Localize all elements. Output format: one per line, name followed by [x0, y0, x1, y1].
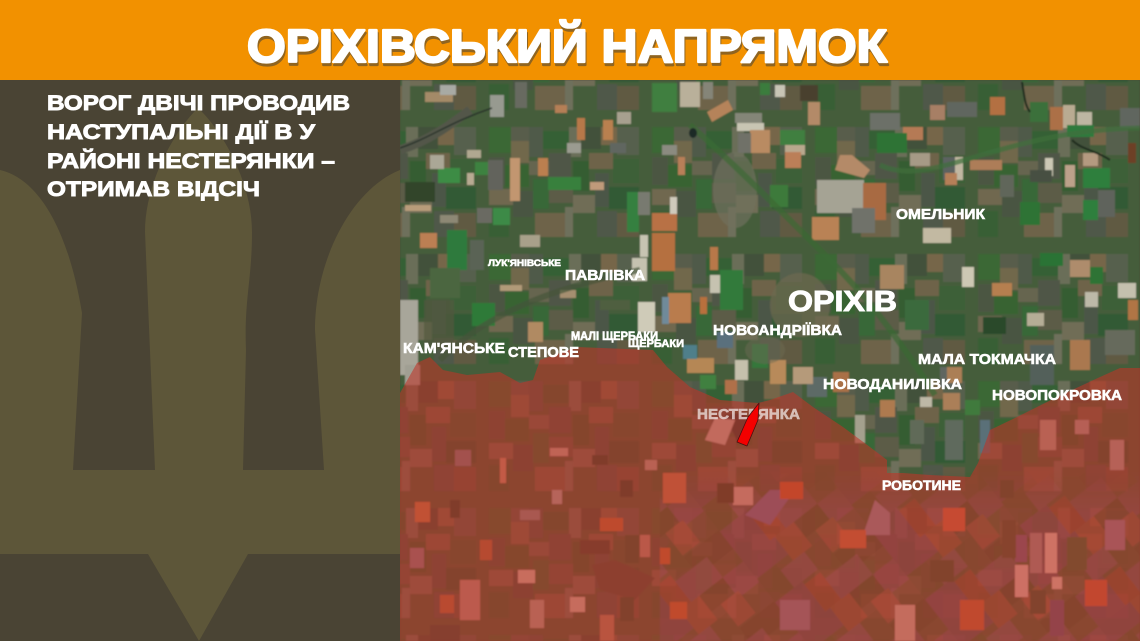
satellite map: [400, 80, 1140, 641]
text block: description: НАСТУПАЛЬНІ ДІЇ В У: [47, 120, 316, 144]
map labels: settlements: НОВОАНДРІЇВКА: [713, 322, 842, 339]
north-west fields: [400, 82, 786, 394]
map labels: settlements: МАЛА ТОКМАЧКА: [918, 351, 1056, 368]
map labels: settlements: ОМЕЛЬНИК: [896, 206, 986, 223]
map labels: settlements: КАМ'ЯНСЬКЕ: [403, 340, 505, 357]
map labels: settlements: НЕСТЕРЯНКА: [697, 406, 800, 423]
map labels: settlements: ПАВЛІВКА: [565, 267, 645, 284]
map labels: settlements: [403, 206, 1122, 493]
north-east fields: [770, 85, 1140, 460]
text block: description: РАЙОНІ НЕСТЕРЯНКИ –: [47, 148, 335, 173]
arrow: enemy attack direction: [737, 403, 759, 446]
map labels: settlements: ЩЕРБАКИ: [628, 338, 684, 350]
icon: trident emblem: [0, 108, 400, 641]
southern fields: [410, 412, 1125, 641]
map labels: settlements: ЛУК'ЯНІВСЬКЕ: [488, 258, 561, 269]
map labels: settlements: РОБОТИНЕ: [882, 477, 961, 493]
occupied territory overlay: [400, 347, 1140, 641]
title: ОРІХІВСЬКИЙ НАПРЯМОК: [247, 20, 888, 72]
text block: description: [47, 91, 350, 201]
text block: description: ОТРИМАВ ВІДСІЧ: [47, 177, 260, 201]
panel: left background: [0, 80, 400, 641]
waterways and tree lines: [400, 82, 1140, 395]
text block: description: ВОРОГ ДВІЧІ ПРОВОДИВ: [47, 91, 350, 115]
map labels: settlements: ОРІХІВ: [788, 286, 897, 318]
map labels: settlements: НОВОДАНИЛІВКА: [823, 376, 962, 393]
map labels: settlements: НОВОПОКРОВКА: [992, 387, 1122, 404]
map labels: settlements: СТЕПОВЕ: [508, 344, 579, 361]
map labels: settlements: МАЛІ ЩЕРБАКИ: [571, 331, 658, 343]
town of Orikhiv area: [713, 152, 830, 364]
header band: [0, 0, 1140, 80]
